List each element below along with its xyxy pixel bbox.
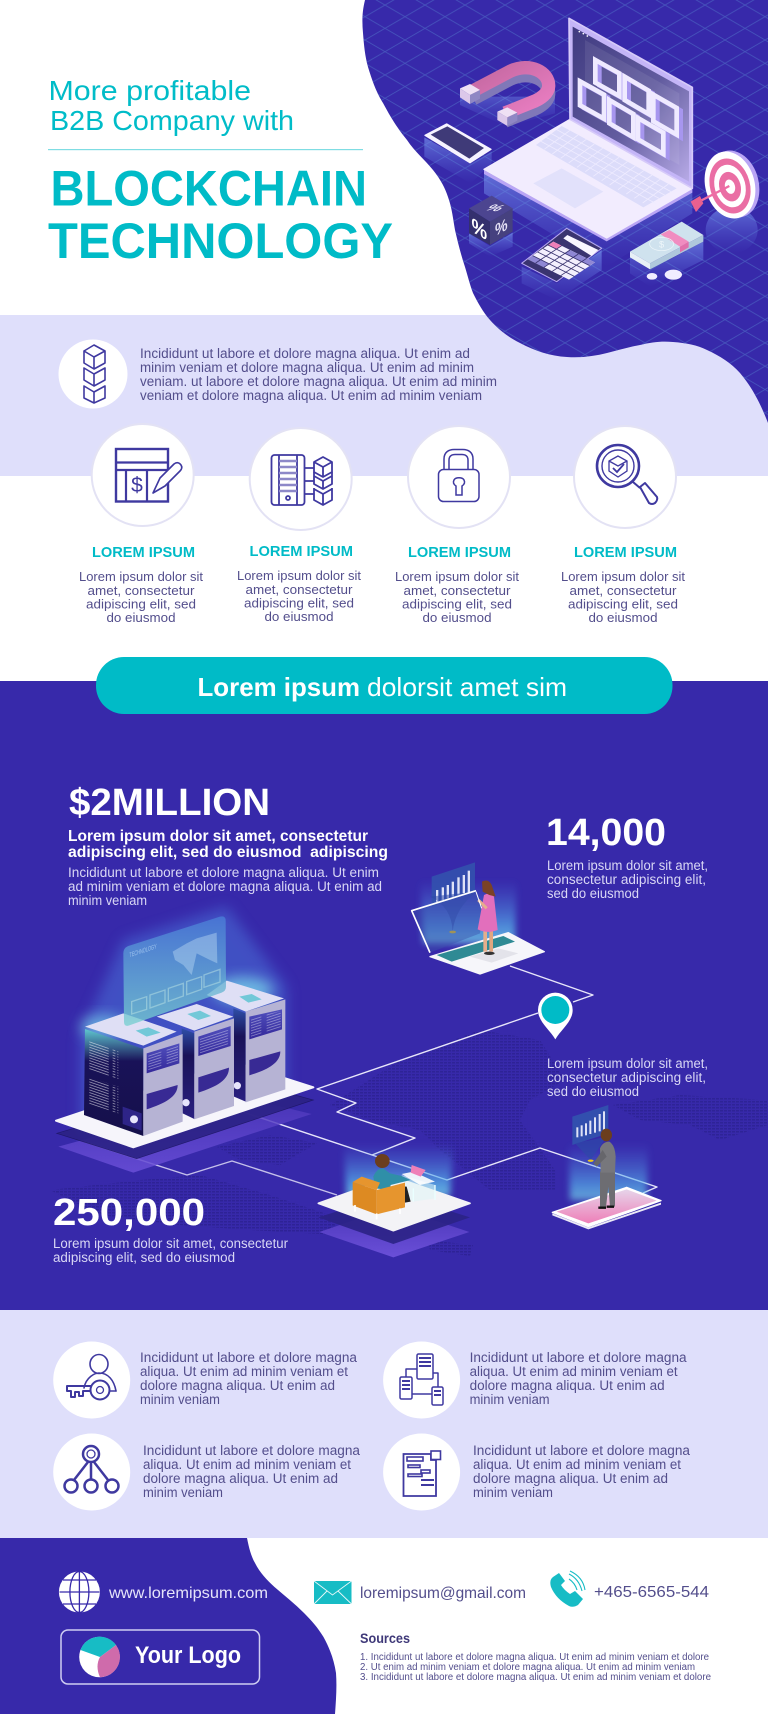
man on phone: [552, 1105, 661, 1229]
stat: 14,000: consectetur adipiscing elit,: [547, 872, 706, 887]
feature column 1: amet, consectetur: [88, 583, 195, 598]
holographic screen: [123, 916, 226, 1026]
feature column 3: LOREM IPSUM: [408, 544, 511, 561]
icon: logo mark: [79, 1637, 120, 1677]
icon: stack of money: [630, 222, 703, 287]
website contact: [59, 1572, 268, 1612]
subtitle: B2B Company with: [50, 105, 294, 136]
benefit 4: Incididunt ut labore et dolore magna: [473, 1443, 690, 1458]
icon: node tree: [53, 1434, 130, 1510]
server platform illustration: [56, 907, 313, 1173]
stat: 250,000: Lorem ipsum dolor sit amet, consectetur: [53, 1236, 288, 1251]
intro text block: [58, 340, 497, 408]
screen label: TECHNOLOGY: [129, 943, 157, 959]
website contact: www.loremipsum.com: [108, 1585, 268, 1602]
footer blob: [0, 1538, 336, 1714]
connector lines: [85, 966, 657, 1195]
stat: $2 million: $2MILLION: [69, 782, 270, 824]
benefit 2: dolore magna aliqua. Ut enim ad: [470, 1378, 665, 1393]
feature column 3: Lorem ipsum dolor sit: [395, 569, 519, 584]
feature column 2: adipiscing elit, sed: [244, 596, 354, 610]
stat: 14,000: 14,000: [546, 812, 666, 854]
icon: phone handset: [550, 1571, 585, 1607]
feature column 3: do eiusmod: [422, 610, 492, 625]
benefit 3: dolore magna aliqua. Ut enim ad: [143, 1471, 338, 1486]
desk and laptop: [402, 1165, 435, 1202]
banner pill: [96, 657, 672, 714]
icon: padlock: [408, 426, 510, 528]
feature column 3: amet, consectetur: [404, 583, 511, 598]
benefit 3: [53, 1434, 360, 1510]
feature column 2: Lorem ipsum dolor sit: [237, 568, 361, 583]
location pin: [538, 993, 573, 1039]
main title: TECHNOLOGY: [48, 213, 393, 269]
feature column 2: [237, 428, 361, 624]
email contact: [314, 1581, 526, 1604]
location text: Lorem ipsum dolor sit amet,: [547, 1056, 708, 1071]
location text: consectetur adipiscing elit,: [547, 1070, 706, 1085]
icon: networked servers: [383, 1342, 460, 1418]
feature column 1: [79, 424, 203, 625]
intro text block: veniam. ut labore et dolore magna aliqua. Ut enim ad minim: [140, 374, 497, 389]
woman on laptop: [412, 862, 544, 974]
laptop: [412, 890, 544, 974]
laptop: [484, 18, 692, 267]
sources: [360, 1630, 711, 1683]
lavender band bottom: [0, 1310, 768, 1538]
email contact: loremipsum@gmail.com: [360, 1585, 526, 1602]
icon: percent dice: [469, 196, 513, 257]
title: [48, 75, 393, 269]
stat: $2 million: Lorem ipsum dolor sit amet, consectetur: [68, 828, 368, 845]
icon: globe: [59, 1572, 100, 1612]
feature column 1: Lorem ipsum dolor sit: [79, 569, 203, 584]
icon: target with dart: [691, 145, 767, 253]
intro text block: minim veniam et dolore magna aliqua. Ut enim ad minim: [140, 360, 474, 375]
feature column 4: [561, 426, 685, 625]
benefit 2: minim veniam: [470, 1392, 550, 1407]
platform layers: [56, 1062, 313, 1173]
benefit 1: Incididunt ut labore et dolore magna: [140, 1350, 357, 1365]
seated person: [353, 1154, 411, 1219]
sources: 2. Ut enim ad minim veniam et dolore magna aliqua. Ut enim ad minim veniam: [360, 1662, 695, 1673]
benefit 4: [383, 1434, 690, 1510]
feature column 1: adipiscing elit, sed: [86, 596, 196, 612]
stat: 14,000: [546, 812, 708, 901]
icon: percent dice: %: [495, 215, 508, 240]
intro text block: Incididunt ut labore et dolore magna aliqua. Ut enim ad: [140, 346, 470, 361]
main title: [48, 161, 393, 269]
feature column 3: [395, 426, 519, 625]
server 2: [157, 1004, 234, 1119]
benefit 3: aliqua. Ut enim ad minim veniam et: [143, 1457, 351, 1472]
phone contact: [550, 1571, 709, 1607]
location text: sed do eiusmod: [547, 1084, 639, 1099]
woman: [476, 881, 498, 955]
benefit 4: aliqua. Ut enim ad minim veniam et: [473, 1457, 681, 1472]
icon: ledger and pen: [92, 424, 194, 526]
benefit 4: minim veniam: [473, 1485, 553, 1500]
stat: $2 million: ad minim veniam et dolore magna aliqua. Ut enim ad: [68, 879, 382, 894]
lavender band top: [0, 315, 768, 476]
feature column 2: do eiusmod: [264, 609, 334, 624]
feature column 1: LOREM IPSUM: [92, 544, 195, 561]
stat: 250,000: [53, 1192, 288, 1265]
man: [593, 1129, 616, 1208]
benefit 2: [383, 1342, 687, 1418]
icon: percent dice: %: [472, 214, 487, 245]
stat: 250,000: adipiscing elit, sed do eiusmod: [53, 1250, 235, 1265]
benefit 3: Incididunt ut labore et dolore magna: [143, 1443, 360, 1458]
icon: stack of money: $: [659, 239, 665, 249]
hero illustration: [424, 18, 767, 300]
stat: $2 million: Incididunt ut labore et dolore magna aliqua. Ut enim: [68, 865, 379, 880]
banner pill: Lorem ipsum: [198, 672, 360, 702]
feature column 4: LOREM IPSUM: [574, 544, 677, 561]
phone contact: +465-6565-544: [594, 1584, 709, 1601]
sources: 3. Incididunt ut labore et dolore magna aliqua. Ut enim ad minim veniam et dolore: [360, 1672, 711, 1683]
glow: [568, 1143, 648, 1200]
intro text block: veniam et dolore magna aliqua. Ut enim ad minim veniam: [140, 388, 482, 403]
stat: 14,000: sed do eiusmod: [547, 886, 639, 901]
icon: percent dice: %: [480, 203, 509, 213]
stat: $2 million: minim veniam: [68, 893, 147, 908]
icon: server with blocks: [250, 428, 352, 530]
icon: envelope: [314, 1581, 352, 1604]
floating chart: [430, 862, 477, 933]
benefit 1: minim veniam: [140, 1392, 220, 1407]
main title: BLOCKCHAIN: [50, 161, 367, 217]
subtitle: More profitable: [48, 75, 251, 106]
icon: calculator: [522, 228, 602, 300]
glow above servers: [80, 907, 287, 1133]
server 3: [207, 981, 285, 1102]
glow: [343, 1143, 453, 1197]
server 1: [84, 1013, 183, 1136]
icon: magnet: [460, 68, 555, 127]
feature column 1: do eiusmod: [106, 610, 176, 625]
icon: magnifier with block: [574, 426, 676, 528]
dotted world map: [50, 1030, 768, 1256]
feature column 4: Lorem ipsum dolor sit: [561, 569, 685, 584]
blockchain blocks on screen: [580, 60, 681, 157]
subtitle: [48, 75, 294, 136]
feature column 4: do eiusmod: [588, 610, 658, 625]
feature column 4: amet, consectetur: [570, 583, 677, 598]
panel: blue section: [0, 681, 768, 1310]
glow: [420, 880, 517, 943]
icon: stacked blocks: [58, 340, 128, 408]
benefit 2: aliqua. Ut enim ad minim veniam et: [470, 1364, 678, 1379]
feature column 4: adipiscing elit, sed: [568, 596, 678, 612]
icon: ledger and pen: $: [131, 474, 143, 497]
sources: 1. Incididunt ut labore et dolore magna aliqua. Ut enim ad minim veniam et dolore: [360, 1652, 709, 1663]
floating chart: [572, 1105, 608, 1162]
feature column 3: adipiscing elit, sed: [402, 596, 512, 612]
benefit 3: minim veniam: [143, 1485, 223, 1500]
benefit 2: Incididunt ut labore et dolore magna: [470, 1350, 687, 1365]
benefit 1: dolore magna aliqua. Ut enim ad: [140, 1378, 335, 1393]
stat: $2 million: adipiscing elit, sed do eiusmod adipiscing: [68, 844, 388, 861]
stat: $2 million: [68, 782, 388, 908]
phone platform: [552, 1187, 661, 1229]
logo box: Your Logo: [135, 1642, 241, 1669]
stat: 250,000: 250,000: [53, 1192, 205, 1234]
benefit 4: dolore magna aliqua. Ut enim ad: [473, 1471, 668, 1486]
icon: user with key: [53, 1342, 130, 1418]
logo box: [61, 1630, 260, 1684]
benefit 1: aliqua. Ut enim ad minim veniam et: [140, 1364, 348, 1379]
sources: Sources: [360, 1630, 410, 1646]
hero blob background: [340, 0, 768, 430]
stat: 14,000: Lorem ipsum dolor sit amet,: [547, 858, 708, 873]
icon: smartphone: [424, 124, 492, 183]
banner pill: dolorsit amet sim: [367, 672, 567, 702]
benefit 1: [53, 1342, 357, 1418]
icon: document: [383, 1434, 460, 1510]
feature column 2: amet, consectetur: [246, 582, 353, 597]
feature column 2: LOREM IPSUM: [250, 543, 353, 560]
workstation platform: [318, 1143, 470, 1257]
location text: [547, 1056, 708, 1099]
